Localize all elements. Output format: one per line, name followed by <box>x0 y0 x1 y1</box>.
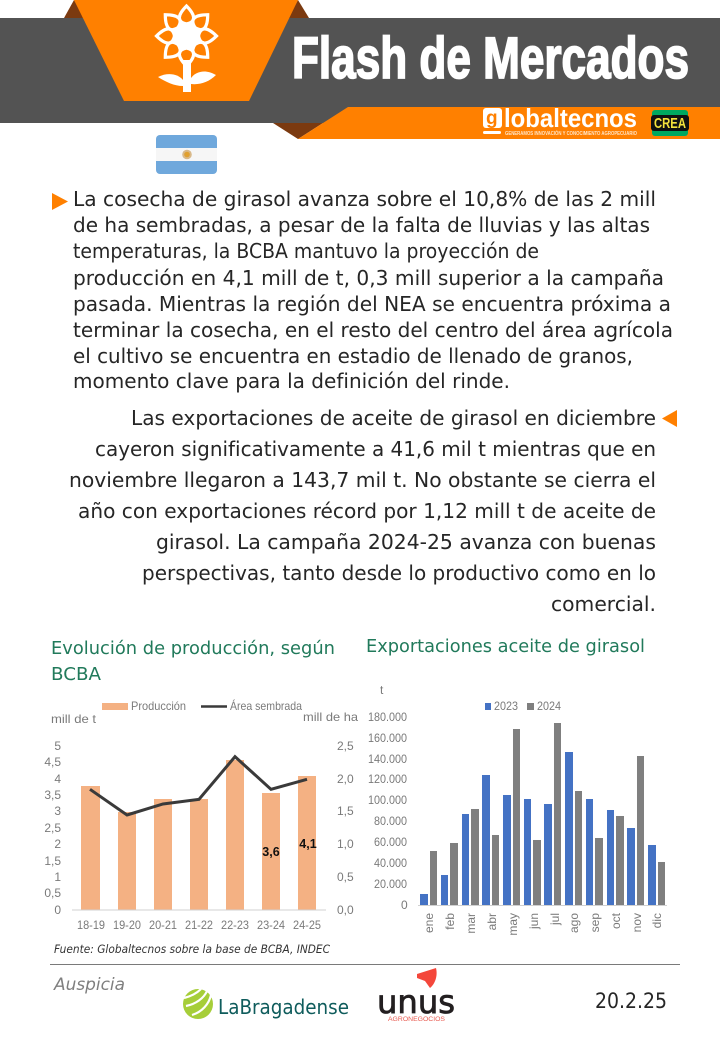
category labels: 18-19 <box>77 918 105 932</box>
text block: cosecha de girasol: el cultivo se encuentra en estadio de llenado de granos, <box>73 344 633 368</box>
date: 20.2.25 <box>595 989 667 1013</box>
month labels: may <box>506 913 520 936</box>
left axis labels: 5 <box>54 739 61 753</box>
bars 2023 <box>420 752 656 905</box>
text block: cosecha de girasol: terminar la cosecha, en el resto del centro del área agrícola <box>73 318 673 342</box>
text block: cosecha de girasol: de ha sembradas, a pesar de la falta de lluvias y las altas <box>73 213 650 237</box>
heading: evolución de producción: BCBA <box>51 664 102 685</box>
logo: La Bragadense <box>183 989 349 1019</box>
category labels: 22-23 <box>221 918 249 932</box>
logo: La Bragadense: LaBragadense <box>218 995 349 1019</box>
month labels: oct <box>609 912 623 929</box>
text block: cosecha de girasol <box>73 187 673 393</box>
right axis labels: 1,0 <box>337 837 354 851</box>
left axis labels: 0,5 <box>44 886 61 900</box>
text block: cosecha de girasol: producción en 4,1 mill de t, 0,3 mill superior a la campaña <box>73 266 664 290</box>
value axis labels: 0 <box>401 898 408 912</box>
left axis labels: 1,5 <box>44 854 61 868</box>
month labels: ene <box>422 913 436 933</box>
text block: exportaciones de aceite <box>69 406 656 616</box>
icon: right arrow marker <box>662 410 677 427</box>
left axis labels: 3,5 <box>44 788 61 802</box>
month labels: abr <box>485 913 499 930</box>
text block: exportaciones de aceite: perspectivas, tanto desde lo productivo como en lo <box>142 561 656 585</box>
logo: globaltecnos: lobaltecnos <box>504 103 637 133</box>
text block: exportaciones de aceite: girasol. La campaña 2024-25 avanza con buenas <box>156 530 656 554</box>
month labels: jun <box>527 913 541 930</box>
value axis labels: 100.000 <box>368 793 407 807</box>
axis title: mill de t: mill de t <box>51 712 97 726</box>
legend: producción y área: Área sembrada <box>230 698 302 713</box>
logo: CREA: CREA <box>654 115 686 132</box>
category labels <box>77 918 321 932</box>
logo: Unus: unus <box>377 983 455 1021</box>
logo: Unus: AGRONEGOCIOS <box>388 1016 446 1023</box>
category labels: 19-20 <box>113 918 141 932</box>
bars 2024 <box>430 723 665 905</box>
value axis labels <box>368 710 408 912</box>
logo: globaltecnos: GENERAMOS INNOVACIÓN Y CONOCIMIENTO AGROPECUARIO <box>505 129 638 137</box>
logo: globaltecnos: g <box>486 108 498 129</box>
chart: exportaciones mensuales <box>368 683 667 936</box>
left axis labels: 1 <box>54 870 61 884</box>
month labels: nov <box>630 913 644 932</box>
text block: exportaciones de aceite: noviembre llegaron a 143,7 mil t. No obstante se cierra el <box>69 468 656 492</box>
month labels: ago <box>567 913 581 933</box>
legend: 2023 y 2024 <box>485 699 561 713</box>
text block: cosecha de girasol: momento clave para la definición del rinde. <box>73 369 510 393</box>
month labels: mar <box>464 913 478 934</box>
right axis labels: 1,5 <box>337 804 354 818</box>
data labels: 3,6 <box>262 845 280 859</box>
text block: exportaciones de aceite: año con exportaciones récord por 1,12 mill t de aceite de <box>78 499 656 523</box>
value axis labels: 120.000 <box>368 772 407 786</box>
value axis labels: 180.000 <box>368 710 407 724</box>
left axis labels: 2 <box>54 837 61 851</box>
month labels: dic <box>650 913 664 928</box>
logo: CREA <box>651 110 689 136</box>
right axis labels: 2,0 <box>337 772 354 786</box>
value axis labels: 60.000 <box>374 835 407 849</box>
right axis labels: 0,5 <box>337 870 354 884</box>
header banner <box>0 0 720 139</box>
month labels: jul <box>548 913 562 926</box>
legend: 2023 y 2024: 2024 <box>537 699 561 713</box>
data labels <box>262 837 317 859</box>
category labels: 20-21 <box>149 918 177 932</box>
left axis labels: 0 <box>54 903 61 917</box>
source note: Fuente: Globaltecnos sobre la base de BCBA, INDEC <box>54 942 330 956</box>
axis title: t: t <box>380 683 384 697</box>
category labels: 24-25 <box>293 918 321 932</box>
month labels: feb <box>443 913 457 930</box>
month labels: sep <box>588 913 602 932</box>
right axis labels: 0,0 <box>337 903 354 917</box>
text block: cosecha de girasol: La cosecha de girasol avanza sobre el 10,8% de las 2 mill <box>73 187 656 211</box>
icon: Argentine flag <box>156 135 217 174</box>
legend: producción y área: Producción <box>131 699 186 713</box>
month labels <box>422 912 664 936</box>
category labels: 21-22 <box>185 918 213 932</box>
chart: producción y área sembrada <box>44 698 358 932</box>
left axis labels: 4,5 <box>44 755 61 769</box>
left axis labels <box>44 739 61 917</box>
left axis labels: 3 <box>54 804 61 818</box>
right axis labels: 2,5 <box>337 739 354 753</box>
heading: evolución de producción: Evolución de producción, según <box>51 638 335 659</box>
sponsors label: Auspicia <box>53 975 125 995</box>
line: área sembrada <box>90 757 307 815</box>
text block: cosecha de girasol: temperaturas, la BCBA mantuvo la proyección de <box>73 239 539 263</box>
heading: exportaciones aceite: Exportaciones aceite de girasol <box>366 636 645 657</box>
text block: cosecha de girasol: pasada. Mientras la región del NEA se encuentra próxima a <box>73 292 671 316</box>
icon: left arrow marker <box>52 193 68 210</box>
value axis labels: 80.000 <box>374 814 407 828</box>
text block: exportaciones de aceite: cayeron significativamente a 41,6 mil t mientras que en <box>95 437 656 461</box>
left axis labels: 2,5 <box>44 821 61 835</box>
value axis labels: 40.000 <box>374 856 407 870</box>
legend: producción y área <box>102 698 302 713</box>
production bars <box>81 760 316 910</box>
category labels: 23-24 <box>257 918 285 932</box>
logo: Unus <box>377 968 455 1023</box>
text block: exportaciones de aceite: Las exportaciones de aceite de girasol en diciembre <box>131 406 656 430</box>
right axis labels <box>337 739 354 917</box>
icon: sunflower <box>156 6 216 92</box>
data labels: 4,1 <box>299 837 317 851</box>
left axis labels: 4 <box>54 772 61 786</box>
legend: 2023 y 2024: 2023 <box>494 699 518 713</box>
value axis labels: 160.000 <box>368 731 407 745</box>
text block: exportaciones de aceite: comercial. <box>551 592 656 616</box>
value axis labels: 20.000 <box>374 877 407 891</box>
heading: evolución de producción <box>51 638 335 685</box>
axis title: mill de ha: mill de ha <box>303 710 358 724</box>
value axis labels: 140.000 <box>368 752 407 766</box>
